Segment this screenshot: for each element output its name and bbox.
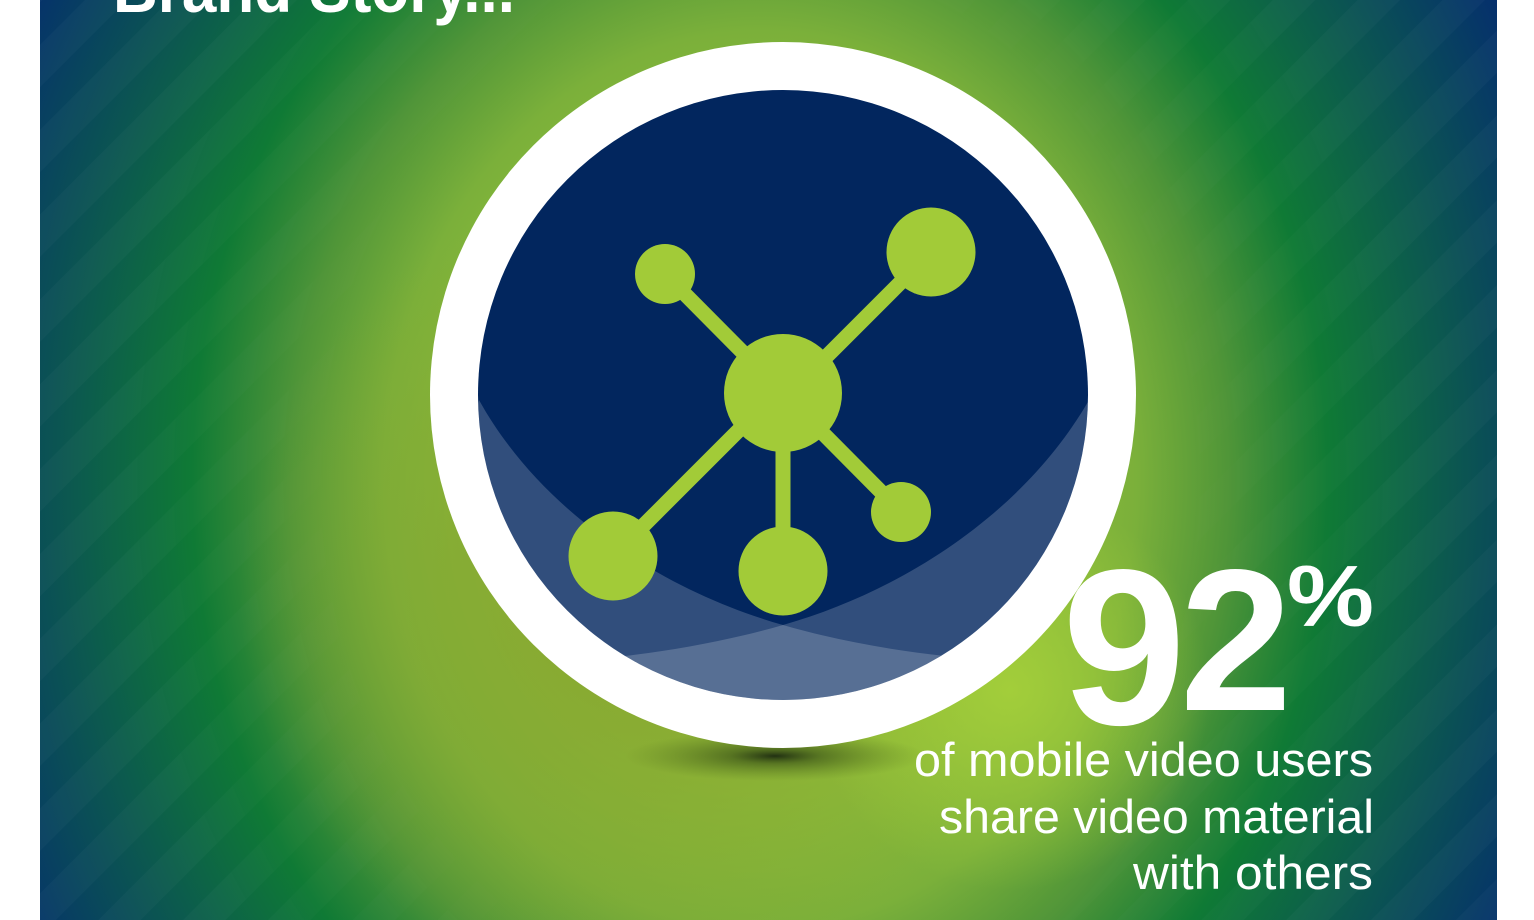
white ring xyxy=(430,42,1136,748)
statistic: 92%: 9 xyxy=(1062,524,1186,772)
description text: share video material xyxy=(939,790,1374,843)
circle drop shadow xyxy=(625,731,925,781)
navy disc xyxy=(478,90,1088,700)
statistic: 92%: 2 xyxy=(1180,527,1292,753)
statistic: 92% xyxy=(1062,524,1374,772)
description text: of mobile video users xyxy=(914,733,1373,786)
circular badge xyxy=(430,42,1136,748)
translucent crescents xyxy=(478,400,1088,700)
statistic: 92%: % xyxy=(1287,549,1374,645)
description text xyxy=(914,733,1374,899)
icon: network hub xyxy=(568,208,976,616)
description text: with others xyxy=(1132,846,1373,899)
